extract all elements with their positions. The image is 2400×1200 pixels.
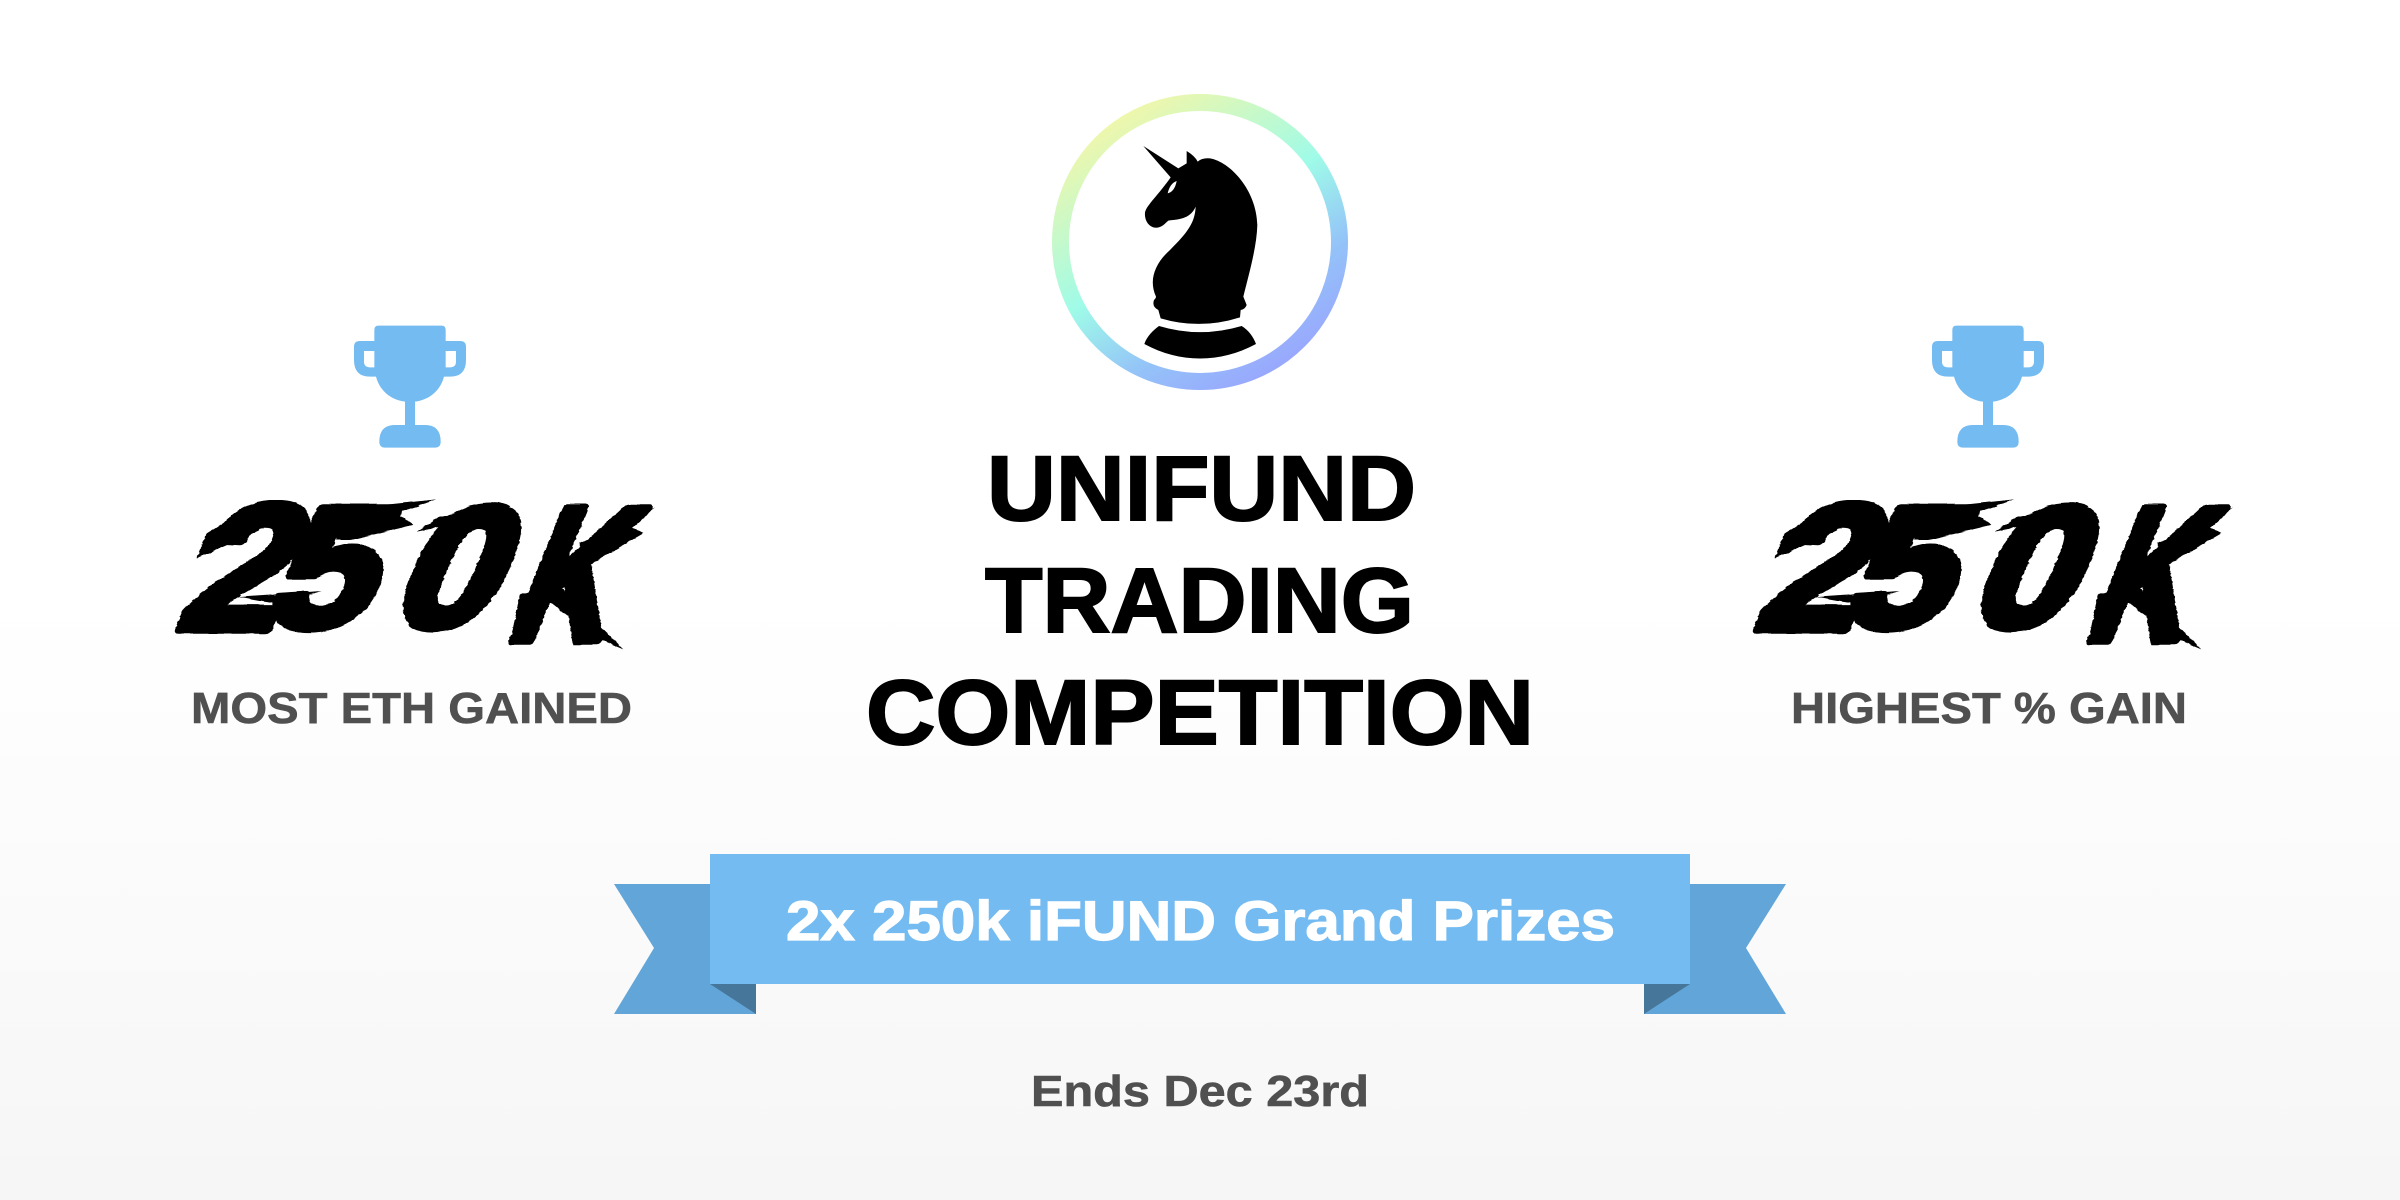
- ribbon fold: left: [710, 984, 756, 1014]
- title: TRADING: [985, 550, 1414, 652]
- prize amount: 2: [158, 467, 340, 667]
- icon: trophy: [1932, 326, 2044, 448]
- ribbon text: 2x 250k iFUND Grand Prizes: [786, 889, 1615, 952]
- prize amount: [1736, 467, 2248, 681]
- title: UNIFUND: [987, 438, 1416, 540]
- icon: unicorn knight: [1143, 146, 1257, 358]
- title: COMPETITION: [866, 662, 1534, 764]
- prize amount: 2: [1736, 467, 1918, 667]
- ribbon body: [710, 854, 1690, 984]
- prize amount: K: [2065, 468, 2248, 681]
- ribbon banner: [614, 854, 1786, 1014]
- icon: trophy: [354, 326, 466, 448]
- title: [866, 438, 1534, 764]
- ribbon fold: right: [1644, 984, 1690, 1014]
- gradient ring: [1060, 102, 1340, 382]
- logo: unicorn chess knight in gradient ring: [1060, 102, 1340, 382]
- panel: highest percent gain prize: [1736, 326, 2248, 733]
- prize amount: 0: [1947, 472, 2134, 664]
- prize amount: K: [487, 468, 670, 681]
- panel: most ETH gained prize: [158, 326, 670, 733]
- ribbon tail: right: [1644, 884, 1786, 1014]
- prize label: HIGHEST % GAIN: [1791, 684, 2187, 733]
- prize amount: 5: [245, 472, 426, 664]
- end date: Ends Dec 23rd: [1031, 1067, 1369, 1116]
- prize label: MOST ETH GAINED: [191, 684, 632, 733]
- prize amount: 0: [369, 472, 556, 664]
- ribbon tail: left: [614, 884, 756, 1014]
- prize amount: [158, 467, 670, 681]
- prize amount: 5: [1823, 472, 2004, 664]
